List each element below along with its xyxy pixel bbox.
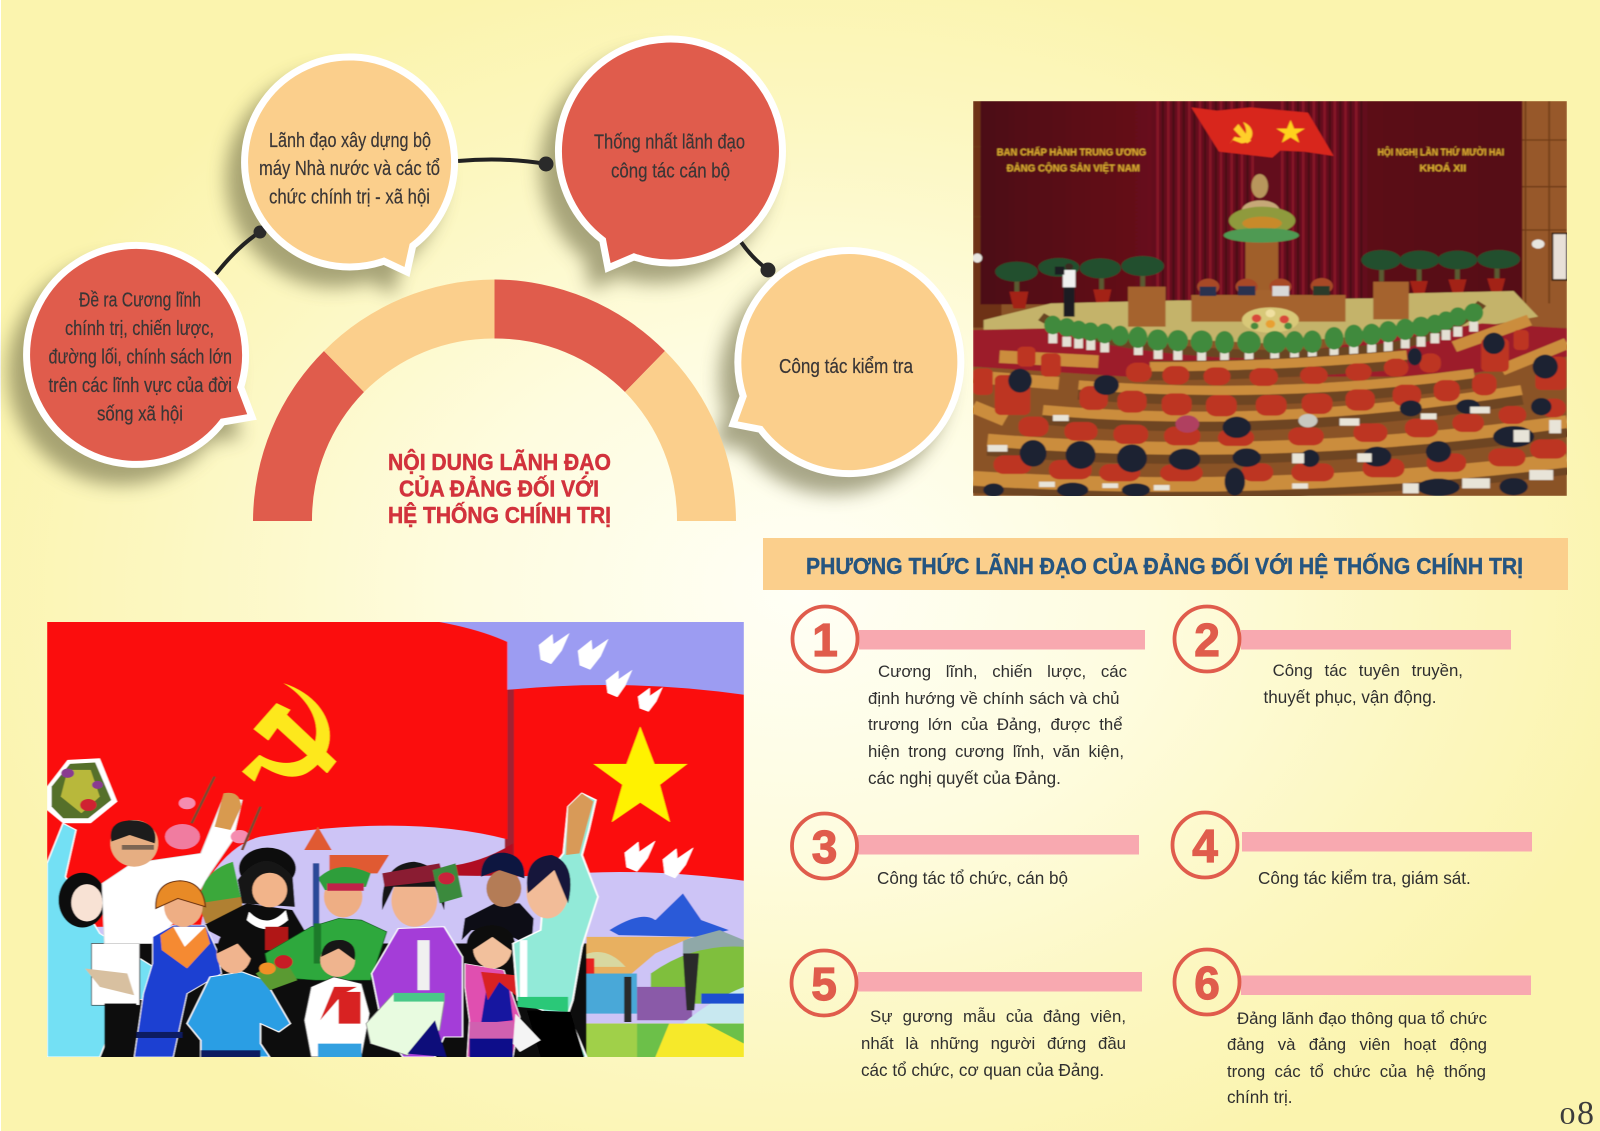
man in dark jacket [462, 853, 534, 947]
woman in aqua blouse waving [513, 793, 598, 1057]
marker 4 [1172, 812, 1532, 878]
bubble 3: cadre work [558, 39, 782, 268]
red seats [973, 330, 1567, 481]
bubble 1: political platform [27, 245, 252, 464]
marker 4: 4 [1192, 820, 1218, 872]
bubble 3: cadre work: công tác cán bộ [611, 160, 730, 182]
text: các tổ chức, cơ quan của Đảng. [861, 1060, 1104, 1080]
temple and roof behind crowd [304, 827, 389, 873]
hall banner text [997, 147, 1504, 174]
text: đảng và đảng viên hoạt động [1227, 1035, 1487, 1054]
bubble 2: state apparatus: máy Nhà nước và các tổ [259, 158, 440, 180]
marker 5: 5 [811, 958, 837, 1010]
text: Công tác tổ chức, cán bộ [877, 869, 1068, 888]
text: trương lớn của Đảng, được thể [868, 715, 1123, 734]
text: Sự gương mẫu của đảng viên, [870, 1007, 1126, 1026]
marker 2 [1174, 606, 1511, 672]
marker 3: 3 [812, 821, 837, 873]
text: nhất là những người đứng đầu [861, 1034, 1126, 1053]
worker with orange helmet and blue overalls [134, 881, 221, 1057]
bust and pedestal [1224, 174, 1299, 298]
man with glasses, white shirt [102, 777, 261, 1057]
bubble 1: political platform: Đề ra Cương lĩnh [79, 290, 201, 312]
text: method 2 [1264, 661, 1463, 707]
text: Công tác tuyên truyền, [1273, 661, 1463, 680]
woman in black and red traditional dress [201, 848, 306, 977]
marker 1: 1 [812, 614, 838, 666]
bubble 2: state apparatus: chức chính trị - xã hội [269, 187, 430, 209]
arch title [388, 448, 611, 528]
plant row [1044, 303, 1483, 362]
star [593, 726, 688, 822]
text: định hướng về chính sách và chủ [868, 688, 1120, 708]
bubble 2: state apparatus [245, 57, 455, 272]
page number [1560, 1095, 1594, 1131]
left flag [47, 622, 508, 927]
bubble 1: political platform: đường lối, chính sách lớn [48, 346, 232, 368]
flower arrangement [1242, 307, 1299, 333]
delegates rows [973, 320, 1567, 489]
marker 6: 6 [1194, 957, 1220, 1009]
white doves [539, 633, 693, 878]
right flag [508, 685, 744, 881]
bubble 1: political platform: chính trị, chiến lược, [65, 318, 214, 340]
text: trong các tổ chức của hệ thống [1227, 1062, 1486, 1081]
girl with red scarf [465, 925, 520, 1057]
page number: 8 [1577, 1095, 1594, 1131]
text: Công tác kiểm tra, giám sát. [1258, 869, 1471, 888]
text: Cương lĩnh, chiến lược, các [878, 662, 1127, 681]
podiums and presidium table [1055, 263, 1409, 327]
poster illustration: flags and people [47, 622, 744, 1057]
hall banner text: BAN CHẤP HÀNH TRUNG ƯƠNG [997, 147, 1146, 158]
bubble 1: political platform: sống xã hội [97, 404, 183, 426]
page number: 0 [1560, 1104, 1576, 1130]
text: các nghị quyết của Đảng. [868, 768, 1061, 788]
palm plants [995, 250, 1520, 308]
arch title: HỆ THỐNG CHÍNH TRỊ [388, 501, 611, 528]
marker 6 [1174, 950, 1531, 1014]
carpet [973, 323, 1567, 377]
hall banner text: ĐẢNG CỘNG SẢN VIỆT NAM [1007, 163, 1140, 174]
flag backdrop [1191, 107, 1334, 158]
marker 1 [792, 606, 1145, 672]
papers on desks [988, 407, 1561, 493]
photo: party central committee conference hall [973, 101, 1567, 496]
methods header banner [763, 538, 1568, 590]
landscape bottom right [577, 893, 744, 1057]
marker 3 [792, 814, 1139, 878]
diagram: leadership content [0, 36, 964, 528]
woman in purple blouse [366, 862, 463, 1057]
bubble 1: political platform: trên các lĩnh vực của đời [48, 375, 232, 397]
connector lines between bubbles [216, 156, 776, 278]
stage-front wall [1041, 303, 1482, 354]
numbered method markers [790, 604, 1532, 1018]
stage floor [984, 291, 1538, 343]
bubble 3: cadre work: Thống nhất lãnh đạo [594, 132, 745, 154]
seated delegates [983, 333, 1558, 497]
bubble 4: inspection: Công tác kiểm tra [779, 356, 914, 378]
arch title: CỦA ĐẢNG ĐỐI VỚI [399, 474, 599, 502]
text: method 5 [861, 1007, 1126, 1080]
bubble 2: state apparatus: Lãnh đạo xây dựng bộ [269, 130, 431, 152]
text: method 1 [868, 662, 1127, 788]
youth union member in blue shirt with flowers [187, 928, 297, 1057]
bubble 4: inspection [733, 251, 961, 474]
text: Đảng lãnh đạo thông qua tổ chức [1237, 1008, 1487, 1028]
hammer and sickle [242, 683, 336, 782]
text: thuyết phục, vận động. [1264, 688, 1436, 707]
arch title: NỘI DUNG LÃNH ĐẠO [388, 448, 611, 475]
text: hiện trong cương lĩnh, văn kiện, [868, 742, 1124, 761]
arch: four segments [253, 280, 736, 521]
text: chính trị. [1227, 1088, 1293, 1107]
woman raising flowers, left [47, 758, 164, 1057]
text: method 6 [1227, 1008, 1487, 1107]
dark crowd base [100, 943, 587, 1057]
marker 2: 2 [1194, 614, 1220, 666]
young pioneer child [304, 940, 370, 1057]
soldier in green uniform [265, 863, 387, 980]
marker 5 [792, 950, 1142, 1016]
hall banner text: KHOÁ XII [1419, 163, 1466, 174]
hall banner text: HỘI NGHỊ LẦN THỨ MƯỜI HAI [1378, 147, 1504, 158]
